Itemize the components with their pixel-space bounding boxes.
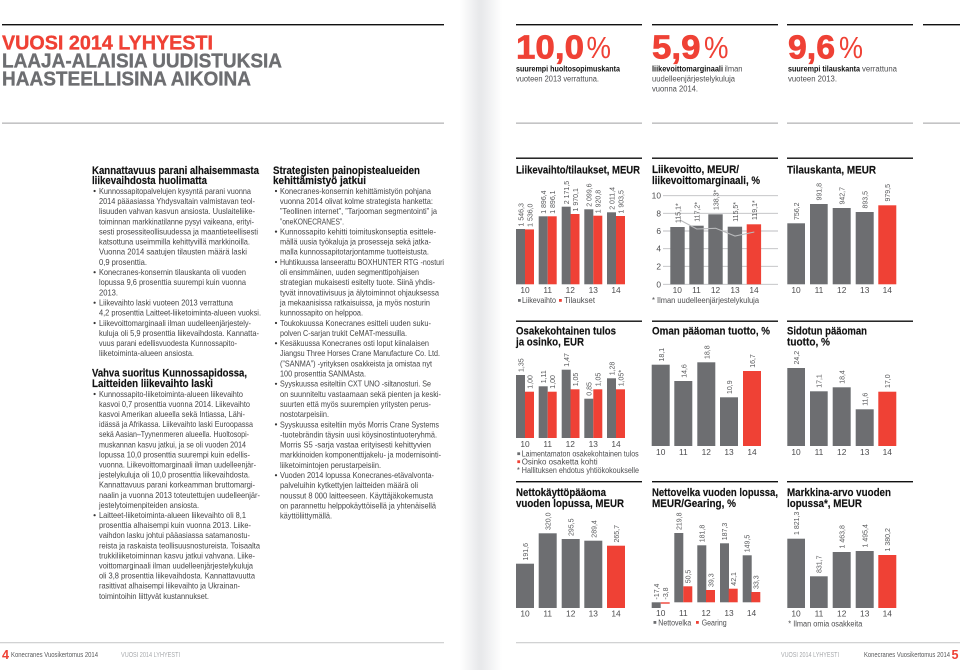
text block: strategiset painopistealueet: käyttöliittymällä. <box>280 512 332 521</box>
chart: Liikevoitto / liikevoittomarginaali: liikevoittomarginaali, % <box>652 175 760 187</box>
chart: Osakekohtainen tulos ja osinko: 1,28 <box>610 362 616 375</box>
chart: Nettokäyttöpääoma: 265,7 <box>614 525 621 542</box>
text block: strategiset painopistealueet: markkinoiden komponenttijakelu- ja modernisointi- <box>280 451 441 460</box>
text block: kannattavuus: katsottuna useimmilla kehittyvillä markkinoilla. <box>99 238 250 247</box>
chart: Nettokäyttöpääoma <box>516 481 642 618</box>
chart: Oman pääoman tuotto: 10 <box>656 447 666 457</box>
chart: Sidotun pääoman tuotto: 12 <box>837 447 847 457</box>
chart: Oman pääoman tuotto: 18,8 <box>704 345 712 359</box>
text block: strategiset painopistealueet: oli ensimmäinen, uuden segmenttipohjaisen <box>280 268 419 277</box>
text block: vahva suoritus: Laitteiden liikevaihto laski <box>92 378 213 390</box>
chart: Osakekohtainen tulos ja osinko <box>515 320 642 475</box>
text block: vahva suoritus: jestelytoimenpiteiden ansiosta. <box>98 501 199 510</box>
text block: strategiset painopistealueet: Syyskuussa esiteltiin myös Morris Crane Systems <box>280 420 439 429</box>
chart: Markkina-arvo: 10 <box>791 608 801 618</box>
chart: Osakekohtainen tulos ja osinko: 1,47 <box>564 353 571 367</box>
footer right <box>781 647 958 662</box>
stat: 10,0 %: suurempi huoltosopimuskanta <box>516 64 620 73</box>
text block: strategiset painopistealueet <box>273 165 444 521</box>
chart: Tilauskanta: 942,7 <box>840 187 846 204</box>
chart: Liikevoitto / liikevoittomarginaali: 10 <box>652 191 661 201</box>
text block: vahva suoritus <box>92 368 260 601</box>
text block: kannattavuus <box>92 165 261 358</box>
footer right: VUOSI 2014 LYHYESTI <box>781 650 839 659</box>
chart: Liikevaihto/tilaukset: 1 896,4 <box>541 190 548 214</box>
text block: kannattavuus: 4,2 prosenttia Laitteet-liiketoiminta-alueen vuoksi. <box>99 309 261 318</box>
footer right: 5 <box>952 647 958 662</box>
text block: strategiset painopistealueet: ”oneKONECRANES”. <box>280 217 344 226</box>
chart: Nettovelka / Gearing: MEUR/Gearing, % <box>652 498 736 510</box>
text block: strategiset painopistealueet: liiketoimintojen perustarpeisiin. <box>280 461 381 470</box>
text block: strategiset painopistealueet: -tuotebrändin täysin uusi köysinostintuoteryhmä. <box>280 430 437 439</box>
chart: Markkina-arvo: Markkina-arvo vuoden <box>787 487 891 499</box>
stat: 10,0 %: vuoteen 2013 verrattuna. <box>516 74 599 84</box>
chart: Markkina-arvo: 14 <box>883 608 892 618</box>
chart: Liikevoitto / liikevoittomarginaali: 14 <box>749 285 759 295</box>
chart: Oman pääoman tuotto: 18,1 <box>659 348 666 362</box>
text block: vahva suoritus: Laitteet-liiketoiminta-alueen liikevaihto oli 8,1 <box>99 511 246 520</box>
text block: vahva suoritus: idässä ja Afrikassa. Liikevaihto laski Euroopassa <box>99 420 253 429</box>
chart: Osakekohtainen tulos ja osinko: * Hallituksen ehdotus yhtiökokoukselle <box>517 466 639 475</box>
chart: Nettokäyttöpääoma: 191,6 <box>523 543 530 560</box>
chart: Liikevoitto / liikevoittomarginaali: 138,3* <box>714 189 720 210</box>
chart: Nettovelka / Gearing: 149,5 <box>745 535 752 552</box>
title <box>2 32 282 91</box>
stat: 10,0 %: 10,0 <box>516 28 584 65</box>
chart: Markkina-arvo: lopussa*, MEUR <box>787 498 862 510</box>
chart: Liikevaihto/tilaukset: 12 <box>566 285 575 295</box>
chart: Tilauskanta <box>787 158 913 295</box>
text block: strategiset painopistealueet: Syyskuussa esiteltiin CXT UNO -siltanosturi. Se <box>280 380 431 389</box>
chart: Liikevaihto/tilaukset <box>516 158 642 305</box>
text block: strategiset painopistealueet: malla kunnossapitotarjontamme tuotteistusta. <box>280 248 429 257</box>
text block: kannattavuus: toiminnan markkinatilanne pysyi vaikeana, erityi- <box>99 217 254 226</box>
text block: strategiset painopistealueet: kunnossapito on helppoa. <box>280 309 363 318</box>
text block: vahva suoritus: Kannattavuus parani korkeamman bruttomargi- <box>99 481 255 490</box>
text block: kannattavuus: Vuonna 2014 saatujen tilausten määrä laski <box>99 248 247 257</box>
text block: kannattavuus: 0,9 prosenttia. <box>99 258 147 267</box>
chart: Tilauskanta: 756,2 <box>794 202 801 220</box>
footer left <box>2 647 180 662</box>
chart: Liikevoitto / liikevoittomarginaali <box>652 158 778 305</box>
chart: Markkina-arvo: 831,7 <box>817 555 824 573</box>
text block: strategiset painopistealueet: Huhtikuussa lanseerattu BOXHUNTER RTG -nosturi <box>280 258 444 267</box>
chart: Osakekohtainen tulos ja osinko: Osinko osaketta kohti <box>522 458 598 467</box>
text block: strategiset painopistealueet: kehittämistyö jatkui <box>273 175 366 187</box>
chart: Osakekohtainen tulos ja osinko: 1,05 <box>573 373 580 386</box>
chart: Oman pääoman tuotto <box>652 320 778 457</box>
chart: Osakekohtainen tulos ja osinko: 11 <box>543 439 552 449</box>
text block: kannattavuus: Kannattavuus parani alhaisemmasta <box>92 165 260 177</box>
text block: vahva suoritus: rasittivat alhaisempi liikevaihto ja Ukrainan- <box>99 582 240 591</box>
stat: 5,9 %: vuonna 2014. <box>652 84 698 94</box>
text block: strategiset painopistealueet: vuonna 2014 olivat kolme strategista hanketta: <box>280 197 433 206</box>
chart: Nettokäyttöpääoma: 12 <box>566 608 576 618</box>
chart: Liikevaihto/tilaukset: 1 920,8 <box>596 190 603 213</box>
title: HAASTEELLISINA AIKOINA <box>2 69 251 91</box>
text block: vahva suoritus: oli 3,8 prosenttia liikevaihdosta. Kannattavuutta <box>99 572 255 581</box>
chart: Nettovelka / Gearing: 12 <box>701 608 711 618</box>
chart: Markkina-arvo: 1 380,2 <box>885 528 892 552</box>
chart: Sidotun pääoman tuotto: 11 <box>815 447 824 457</box>
chart: Markkina-arvo: 1 495,4 <box>862 524 870 548</box>
chart: Liikevoitto / liikevoittomarginaali: 8 <box>656 208 661 218</box>
chart: Liikevoitto / liikevoittomarginaali: 11 <box>692 285 701 295</box>
chart: Nettokäyttöpääoma: vuoden lopussa, MEUR <box>516 498 624 510</box>
chart: Tilauskanta: 979,5 <box>885 184 892 202</box>
chart: Markkina-arvo: * Ilman omia osakkeita <box>788 619 863 628</box>
chart: Liikevaihto/tilaukset: Liikevaihto/tilaukset, MEUR <box>516 164 640 176</box>
stat: 9,6 % <box>788 28 898 84</box>
stat: 9,6 %: suurempi tilauskanta <box>788 64 860 73</box>
chart: Osakekohtainen tulos ja osinko: Laimentamaton osakekohtainen tulos <box>522 450 639 459</box>
chart: Nettovelka / Gearing: Nettovelka vuoden lopussa, <box>652 487 778 499</box>
chart: Osakekohtainen tulos ja osinko: 0,85 <box>587 382 594 396</box>
chart: Sidotun pääoman tuotto: 17,0 <box>885 374 892 388</box>
chart: Tilauskanta: 14 <box>883 285 892 295</box>
chart: Nettokäyttöpääoma: 11 <box>543 608 552 618</box>
chart: Liikevaihto/tilaukset: Tilaukset <box>564 296 596 305</box>
chart: Sidotun pääoman tuotto: 17,1 <box>817 374 824 388</box>
stat: 5,9 %: % <box>704 30 728 65</box>
stat: 9,6 %: 9,6 <box>788 28 835 65</box>
text block: strategiset painopistealueet: Strategisten painopistealueiden <box>273 165 420 177</box>
stat: 5,9 %: 5,9 <box>652 28 700 65</box>
text block: kannattavuus: liiketoiminta-alueen ansiosta. <box>99 349 194 358</box>
chart: Liikevaihto/tilaukset: 13 <box>589 285 598 295</box>
text block: strategiset painopistealueet: mällä uusia työkaluja ja prosesseja sekä jatka- <box>280 238 431 247</box>
chart: Osakekohtainen tulos ja osinko: 1,11 <box>541 370 548 383</box>
chart: Oman pääoman tuotto: 14,6 <box>682 364 688 378</box>
chart: Oman pääoman tuotto: 16,7 <box>750 354 757 368</box>
text block: vahva suoritus: Kunnossapito-liiketoiminta-alueen liikevaihto <box>99 390 243 399</box>
stat: 9,6 %: % <box>839 30 863 65</box>
chart: Liikevaihto/tilaukset: Liikevaihto <box>522 296 556 305</box>
chart: Osakekohtainen tulos ja osinko: 14 <box>611 439 621 449</box>
chart: Nettokäyttöpääoma: 320,0 <box>546 512 553 530</box>
text block: kannattavuus: Konecranes-konsernin tilauskanta oli vuoden <box>99 268 246 277</box>
chart: Oman pääoman tuotto: 11 <box>679 447 688 457</box>
chart: Liikevaihto/tilaukset: 2 099,6 <box>587 183 594 207</box>
chart: Nettovelka / Gearing: 187,3 <box>722 523 729 540</box>
chart: Sidotun pääoman tuotto: 24,2 <box>794 351 801 364</box>
chart: Osakekohtainen tulos ja osinko: 1,00 <box>550 375 557 389</box>
chart: Sidotun pääoman tuotto: 18,4 <box>840 370 846 384</box>
chart: Liikevoitto / liikevoittomarginaali: 6 <box>656 226 661 236</box>
text block: strategiset painopistealueet: ”Teollinen internet”, ”Tarjooman segmentointi” ja <box>280 207 437 216</box>
text block: strategiset painopistealueet: strategian mukaisesti esitelty tuote. Siinä yhdis- <box>280 278 435 287</box>
chart: Liikevoitto / liikevoittomarginaali: 115,5* <box>733 202 740 222</box>
chart: Markkina-arvo: 12 <box>837 608 847 618</box>
chart: Liikevoitto / liikevoittomarginaali: 119,1* <box>752 200 759 220</box>
text block: strategiset painopistealueet: (”SANMA”) -yrityksen osakkeista ja omistaa nyt <box>280 359 433 368</box>
chart: Tilauskanta: Tilauskanta, MEUR <box>787 164 876 176</box>
chart: Oman pääoman tuotto: 12 <box>702 447 711 457</box>
text block: strategiset painopistealueet: noussut 8 000 laitteeseen. Käyttäjäkokemusta <box>280 491 433 500</box>
chart: Liikevaihto/tilaukset: 1 903,5 <box>618 190 626 214</box>
chart: Liikevaihto/tilaukset: 10 <box>520 285 530 295</box>
text block: kannattavuus: Liikevaihto laski vuoteen 2013 verrattuna <box>99 298 233 308</box>
chart: Sidotun pääoman tuotto: 11,6 <box>862 393 870 406</box>
chart: Liikevoitto / liikevoittomarginaali: 13 <box>730 285 740 295</box>
text block: strategiset painopistealueet: polven C-sarjan trukit CeMAT-messuilla. <box>280 329 407 338</box>
text block: strategiset painopistealueet: Kesäkuussa Konecranes osti loput kiinalaisen <box>280 339 429 348</box>
stat: 5,9 % <box>652 28 742 93</box>
chart: Osakekohtainen tulos ja osinko: Osakekohtainen tulos <box>516 326 616 338</box>
text block: strategiset painopistealueet: Morris S5 -sarja vastaa erityisesti kehittyvien <box>280 441 431 450</box>
chart: Oman pääoman tuotto: 10,9 <box>727 380 734 394</box>
stat: 5,9 %: ilman <box>724 64 742 73</box>
chart: Liikevaihto/tilaukset: 2 171,5 <box>564 181 571 204</box>
chart: Nettokäyttöpääoma: 295,5 <box>569 518 576 536</box>
stat: 9,6 %: vuoteen 2013. <box>788 74 837 84</box>
text block: vahva suoritus: jestelykuluja oli 10,0 prosenttia liikevaihdosta. <box>98 471 250 480</box>
text block: vahva suoritus: voittomarginaali ilman uudelleenjärjestelykuluja <box>99 562 253 570</box>
text block: vahva suoritus: Vahva suoritus Kunnossapidossa, <box>92 368 247 380</box>
text block: vahva suoritus: vuonna. Liikevoittomarginaali ilman uudelleenjär- <box>99 460 256 470</box>
chart: Osakekohtainen tulos ja osinko: 13 <box>589 439 598 449</box>
text block: vahva suoritus: trukkiliiketoiminnan kasvu jatkui vahvana. Liike- <box>99 551 255 560</box>
text block: vahva suoritus: kasvoi 0,7 prosenttia vuonna 2014. Liikevaihto <box>99 400 250 409</box>
chart: Nettokäyttöpääoma: 10 <box>520 608 530 618</box>
chart: Nettovelka / Gearing: -17,4 <box>654 583 661 600</box>
chart: Sidotun pääoman tuotto: 13 <box>860 447 870 457</box>
chart: Markkina-arvo: 13 <box>860 608 870 618</box>
chart: Nettokäyttöpääoma: Nettokäyttöpääoma <box>516 487 607 499</box>
chart: Liikevaihto/tilaukset: 1 536,0 <box>527 203 534 227</box>
chart: Nettovelka / Gearing: 50,5 <box>686 570 692 583</box>
chart: Sidotun pääoman tuotto: 10 <box>791 447 801 457</box>
chart: Tilauskanta: 991,8 <box>817 183 824 200</box>
chart: Liikevoitto / liikevoittomarginaali: Liikevoitto, MEUR/ <box>652 164 739 176</box>
chart: Nettokäyttöpääoma: 13 <box>589 608 598 618</box>
stat: 10,0 % <box>516 28 620 84</box>
chart: Osakekohtainen tulos ja osinko: 1,05 <box>596 373 603 386</box>
text block: vahva suoritus: reista ja raskaista teollisuusnostureista. Toisaalta <box>99 541 260 550</box>
text block: kannattavuus: liikevaihdosta huolimatta <box>92 175 208 187</box>
text block: strategiset painopistealueet: on suunniteltu vastaamaan sekä pienten ja keski- <box>280 390 441 399</box>
text block: vahva suoritus: sekä Aasian–Tyynenmeren alueella. Huoltosopi- <box>99 430 249 439</box>
chart: Tilauskanta: 893,5 <box>862 191 870 208</box>
chart: Sidotun pääoman tuotto <box>787 320 913 457</box>
footer left: 4 <box>2 647 10 662</box>
chart: Liikevaihto/tilaukset: 1 970,1 <box>573 188 580 212</box>
chart: Osakekohtainen tulos ja osinko: 10 <box>520 439 530 449</box>
chart: Liikevaihto/tilaukset: 11 <box>543 285 552 295</box>
text block: kannattavuus: 2014 pääasiassa Yhdysvaltain valmistavan teol- <box>99 197 255 206</box>
chart: Osakekohtainen tulos ja osinko: ja osinko, EUR <box>515 336 584 348</box>
chart: Nettovelka / Gearing: 39,3 <box>708 573 716 587</box>
text block: strategiset painopistealueet: suurten että myös suurempien yritysten perus- <box>280 400 431 409</box>
stat: 5,9 %: uudelleenjärjestelykuluja <box>652 74 736 84</box>
text block: kannattavuus: 2013. <box>99 288 118 297</box>
text block: strategiset painopistealueet: nostotarpeisiin. <box>280 410 329 419</box>
text block: strategiset painopistealueet: Vuoden 2014 lopussa Konecranes-etävalvonta- <box>280 471 434 480</box>
title: VUOSI 2014 LYHYESTI <box>2 32 213 54</box>
text block: vahva suoritus: prosenttia alhaisempi kuin vuonna 2013. Liike- <box>99 521 251 530</box>
text block: kannattavuus: vuus parani edellisvuodesta Kunnossapito- <box>99 339 237 348</box>
chart: Markkina-arvo: 1 821,3 <box>794 512 801 535</box>
chart: Nettovelka / Gearing: 33,3 <box>754 575 761 589</box>
text block: strategiset painopistealueet: 100 prosenttia SANMAsta. <box>280 370 366 378</box>
text block: vahva suoritus: vaihdon lasku johtui pääasiassa satamanostu- <box>99 531 250 540</box>
chart: Markkina-arvo <box>787 481 913 628</box>
chart: Oman pääoman tuotto: 13 <box>724 447 734 457</box>
chart: Liikevoitto / liikevoittomarginaali: 10 <box>673 285 682 295</box>
chart: Liikevaihto/tilaukset: 2 011,4 <box>610 187 616 210</box>
chart: Nettovelka / Gearing: 10 <box>656 608 666 618</box>
chart: Osakekohtainen tulos ja osinko: 1,00 <box>527 375 534 389</box>
chart: Liikevoitto / liikevoittomarginaali: 12 <box>711 285 720 295</box>
text block: strategiset painopistealueet: on parannettu helppokäyttöisellä ja yhtenäisellä <box>280 502 436 510</box>
chart: Nettovelka / Gearing <box>652 481 778 627</box>
chart: Nettokäyttöpääoma: 14 <box>611 608 621 618</box>
stat: 5,9 %: liikevoittomarginaali <box>652 64 723 73</box>
chart: Osakekohtainen tulos ja osinko: 1,05* <box>618 370 626 386</box>
chart: Osakekohtainen tulos ja osinko: 1,35 <box>518 358 526 372</box>
chart: Nettovelka / Gearing: Gearing <box>702 618 727 627</box>
title: LAAJA-ALAISIA UUDISTUKSIA <box>2 50 282 72</box>
text block: kannattavuus: sesti prosessiteollisuudessa ja maantieteellisesti <box>99 227 258 236</box>
text block: vahva suoritus: kasvoi Amerikan alueella sekä Intiassa, Lähi- <box>99 410 245 419</box>
chart: Nettovelka / Gearing: 13 <box>724 608 734 618</box>
text block: vahva suoritus: lopussa 10,0 prosenttia suurempi kuin edellis- <box>99 450 250 459</box>
text block: strategiset painopistealueet: Kunnossapito kehitti toimituskonseptia esittele- <box>280 227 436 236</box>
chart: Nettovelka / Gearing: 181,8 <box>700 525 706 542</box>
text block: strategiset painopistealueet: ja mekaanisissa ratkaisuissa, ja myös nosturin <box>279 298 430 308</box>
chart: Tilauskanta: 12 <box>837 285 847 295</box>
chart: Oman pääoman tuotto: 14 <box>747 447 757 457</box>
text block: strategiset painopistealueet: Konecranes-konsernin kehittämistyön pohjana <box>280 187 431 196</box>
footer left: Konecranes Vuosikertomus 2014 <box>11 650 98 659</box>
chart: Liikevaihto/tilaukset: 14 <box>611 285 621 295</box>
stat: 10,0 %: % <box>586 30 611 65</box>
chart: Nettovelka / Gearing: 42,1 <box>731 572 738 586</box>
chart: Liikevoitto / liikevoittomarginaali: 115,1* <box>676 203 682 223</box>
text block: kannattavuus: lopussa 9,6 prosenttia suurempi kuin vuonna <box>99 278 246 287</box>
text block: kannattavuus: kuluja oli 5,9 prosenttia liikevaihdosta. Kannatta- <box>99 329 259 338</box>
chart: Tilauskanta: 10 <box>791 285 801 295</box>
chart: Liikevaihto/tilaukset: 1 896,1 <box>550 190 557 214</box>
chart: Tilauskanta: 11 <box>815 285 824 295</box>
stat: 9,6 %: verrattuna <box>862 64 898 73</box>
text block: strategiset painopistealueet: tyvät innovatiivisuus ja älytoiminnot ohjauksessa <box>280 288 439 297</box>
text block: vahva suoritus: naalin ja vuonna 2013 toteutettujen uudelleenjär- <box>99 491 260 500</box>
text block: strategiset painopistealueet: palveluihin kytkettyjen laitteiden määrä oli <box>280 481 418 490</box>
chart: Liikevaihto/tilaukset: 1 546,3 <box>518 203 526 226</box>
chart: Nettovelka / Gearing: 11 <box>679 608 688 618</box>
chart: Nettovelka / Gearing: Nettovelka <box>658 618 692 627</box>
chart: Osakekohtainen tulos ja osinko: 12 <box>566 439 575 449</box>
chart: Liikevoitto / liikevoittomarginaali: 117,2* <box>694 202 702 222</box>
chart: Liikevoitto / liikevoittomarginaali: * Ilman uudelleenjärjestelykuluja <box>652 296 760 305</box>
chart: Liikevoitto / liikevoittomarginaali: 4 <box>656 244 661 254</box>
chart: Nettovelka / Gearing: 219,8 <box>676 512 684 530</box>
text block: vahva suoritus: muskannan kasvu jatkui, ja se oli vuoden 2014 <box>99 440 246 449</box>
chart: Markkina-arvo: 11 <box>815 608 824 618</box>
chart: Nettovelka / Gearing: -3,8 <box>663 587 670 600</box>
chart: Oman pääoman tuotto: Oman pääoman tuotto, % <box>652 326 770 338</box>
chart: Sidotun pääoman tuotto: tuotto, % <box>787 336 830 348</box>
chart: Liikevoitto / liikevoittomarginaali: 0 <box>656 279 661 289</box>
text block: kannattavuus: lisuuden vahvan kasvun ansiosta. Uuslaiteliike- <box>99 207 255 216</box>
chart: Nettovelka / Gearing: 14 <box>747 608 756 618</box>
text block: vahva suoritus: toimintoihin liittyvät kustannukset. <box>99 592 209 601</box>
chart: Tilauskanta: 13 <box>860 285 870 295</box>
text block: kannattavuus: Liikevoittomarginaali ilman uudelleenjärjestely- <box>99 319 251 328</box>
chart: Liikevoitto / liikevoittomarginaali: 2 <box>656 261 661 271</box>
chart: Nettokäyttöpääoma: 289,4 <box>591 520 598 538</box>
chart: Sidotun pääoman tuotto: Sidotun pääoman <box>787 326 867 338</box>
chart: Sidotun pääoman tuotto: 14 <box>883 447 892 457</box>
chart: Markkina-arvo: 1 463,8 <box>840 525 846 548</box>
text block: strategiset painopistealueet: Jiangsu Three Horses Crane Manufacture Co. Ltd. <box>280 349 440 358</box>
footer left: VUOSI 2014 LYHYESTI <box>121 650 180 659</box>
text block: strategiset painopistealueet: Toukokuussa Konecranes esitteli uuden suku- <box>280 319 431 328</box>
text block: kannattavuus: Kunnossapitopalvelujen kysyntä parani vuonna <box>99 187 251 196</box>
